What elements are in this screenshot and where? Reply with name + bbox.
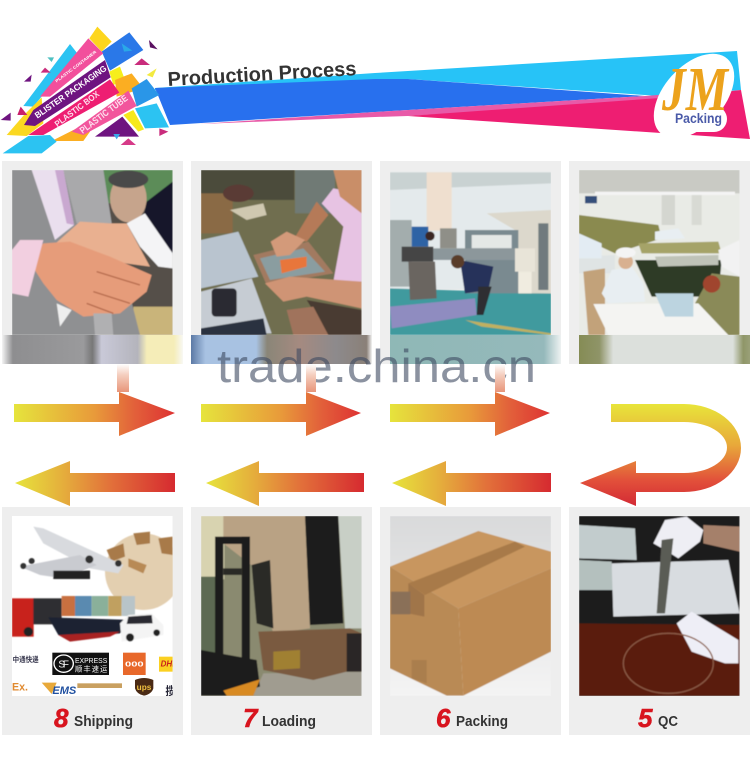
photo: factory workers <box>579 170 740 335</box>
logo: FedEx: Ex. <box>12 682 28 694</box>
photo: stamping a sample <box>201 170 362 335</box>
logo: UPS: ups <box>137 682 152 692</box>
arrow: step 3 to 4 <box>390 392 550 436</box>
photo: caliper inspection <box>579 516 740 696</box>
label: 6 Packing: 6 <box>436 703 451 733</box>
ribbon label: blister packaging: BLISTER PACKAGING <box>33 63 109 120</box>
label: 5 QC <box>638 703 678 733</box>
label: 7 Loading <box>243 703 316 733</box>
arrow: U-turn step 4 to 5 <box>580 404 741 506</box>
label: 5 QC: QC <box>658 714 678 730</box>
photo: cardboard box <box>390 516 551 696</box>
label: 7 Loading: 7 <box>243 703 259 733</box>
logo: UPS <box>135 678 153 696</box>
panel: step 2 <box>191 161 372 364</box>
logo: SF Express: 顺丰速运 <box>75 664 108 673</box>
blurred reflection strip <box>579 335 750 364</box>
panel: step 8 shipping <box>2 507 183 735</box>
logo: SF Express: SF <box>58 659 69 670</box>
label: 5 QC: 5 <box>638 703 653 733</box>
logo: EMS: EMS <box>52 685 77 697</box>
reflection streaks <box>117 364 505 392</box>
ribbon label: plastic box: PLASTIC BOX <box>53 89 101 129</box>
logo: TNT <box>123 653 146 675</box>
label: 8 Shipping <box>54 703 133 733</box>
arrow: step 7 to 8 <box>15 461 175 506</box>
arrow: step 5 to 6 <box>392 461 551 506</box>
ribbon label: plastic container: PLASTIC CONTAINER <box>54 49 97 83</box>
arrow: step 2 to 3 <box>201 392 361 436</box>
panel: step 1 <box>2 161 183 364</box>
panel: step 4 <box>569 161 750 364</box>
logo: DHL: DHL <box>161 660 177 669</box>
watermark: trade.china.cn <box>217 340 536 392</box>
label: 7 Loading: Loading <box>262 714 316 730</box>
arrow: step 6 to 7 <box>206 461 364 506</box>
title: Production Process <box>167 58 357 91</box>
panel: step 5 QC <box>569 507 750 735</box>
blurred reflection strip <box>2 335 183 364</box>
logo: SF Express <box>52 653 109 675</box>
blurred reflection strip <box>191 335 372 364</box>
banner: pink strip <box>200 94 670 124</box>
logo: EMS <box>42 682 122 694</box>
photo: forklift loading truck <box>201 516 362 696</box>
photo: shipping collage <box>12 516 182 698</box>
blurred reflection strip <box>390 335 561 364</box>
label: 6 Packing: Packing <box>456 714 508 730</box>
logo: JM Packing: JM <box>661 56 729 124</box>
logo: JM Packing <box>638 39 750 153</box>
label: 6 Packing <box>436 703 508 733</box>
logo: TNT: 000 <box>125 660 144 669</box>
logo: carrier glyph: 揽 <box>165 684 177 698</box>
banner: magenta band <box>408 90 750 139</box>
label: 8 Shipping: Shipping <box>74 714 133 730</box>
logo: DHL <box>159 656 173 672</box>
panel: step 6 packing <box>380 507 561 735</box>
photo: forming machine <box>390 172 551 335</box>
photo: handshake <box>12 170 173 335</box>
panel: step 3 <box>380 161 561 364</box>
arrow: step 1 to 2 <box>14 392 175 436</box>
label: 8 Shipping: 8 <box>54 703 69 733</box>
logo: JM Packing: Packing <box>675 111 722 126</box>
logo: SF Express: EXPRESS <box>75 656 107 665</box>
banner: blue band <box>155 79 645 125</box>
header banner <box>1 27 750 153</box>
logo: ZTO: 中通快递 <box>13 655 39 664</box>
ribbon label: plastic tube: PLASTIC TUBE <box>78 93 130 136</box>
panel: step 7 loading <box>191 507 372 735</box>
burst of ribbons <box>1 27 169 153</box>
banner: light blue band <box>155 51 741 96</box>
